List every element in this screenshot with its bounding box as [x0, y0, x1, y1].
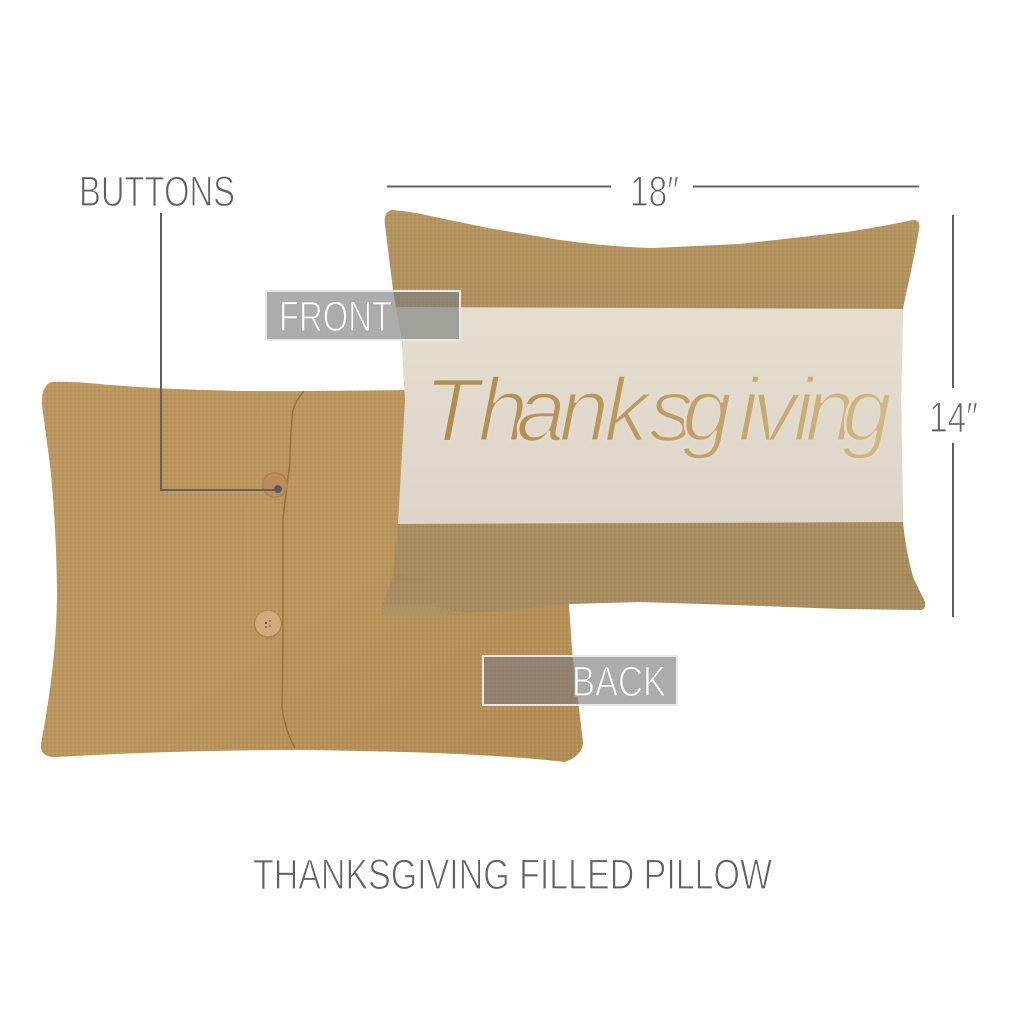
back pillow — [41, 382, 583, 762]
cream centre band — [395, 307, 910, 524]
title: THANKSGIVING FILLED PILLOW — [253, 851, 772, 899]
lower button — [254, 610, 282, 638]
inner lining patch — [382, 606, 460, 615]
width dimension: 18″ — [630, 168, 679, 216]
corner creases — [394, 575, 925, 580]
placket seam — [282, 391, 304, 748]
front pillow — [381, 210, 926, 615]
height dimension: 14″ — [929, 394, 978, 442]
embroidered word: Thanksgiving — [424, 361, 892, 461]
buttons label: BUTTONS — [79, 168, 235, 216]
back label: BACK — [572, 658, 666, 706]
front label: FRONT — [279, 293, 392, 341]
placket fold — [247, 392, 265, 592]
top button — [262, 472, 288, 498]
buttons leader line — [161, 213, 282, 493]
back label — [483, 656, 677, 706]
